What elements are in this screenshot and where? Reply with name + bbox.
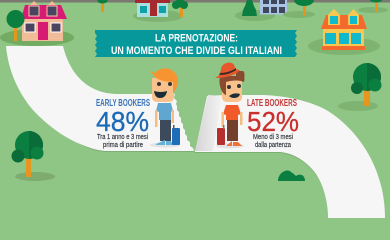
character: late booker [215, 63, 244, 148]
early bookers stats: Tra 1 anno e 3 mesi [97, 134, 148, 141]
bush [278, 170, 305, 181]
title banner: LA PRENOTAZIONE: [155, 32, 238, 44]
tree: top centre-left [98, 0, 108, 12]
early bookers stats: prima di partire [103, 142, 143, 149]
tree: top centre-right [283, 0, 315, 18]
house: teal, top centre [133, 0, 183, 22]
title banner [95, 30, 297, 57]
house: pink, top left [0, 1, 74, 46]
early bookers stats: 48% [96, 106, 149, 137]
tree: pine, top centre [235, 0, 275, 21]
tree: right [338, 63, 382, 111]
late bookers stats: LATE BOOKERS [247, 98, 297, 109]
winding road: right section [195, 95, 385, 218]
late bookers stats [247, 98, 299, 149]
tree: beside pink house [6, 10, 24, 41]
character: early booker [150, 68, 180, 148]
house: orange, right [308, 9, 380, 55]
house: blue building, top centre [260, 0, 287, 14]
late bookers stats: 52% [247, 106, 299, 137]
late bookers stats: dalla partenza [255, 142, 291, 149]
title banner: UN MOMENTO CHE DIVIDE GLI ITALIANI [111, 45, 282, 57]
late bookers stats: Meno di 3 mesi [253, 134, 293, 141]
tree: lower left [12, 131, 55, 181]
early bookers stats: EARLY BOOKERS [96, 98, 150, 109]
winding road: left section [6, 46, 194, 152]
tree: beside teal house [172, 0, 188, 17]
tree: top right corner [358, 0, 388, 13]
early bookers stats [96, 98, 150, 149]
